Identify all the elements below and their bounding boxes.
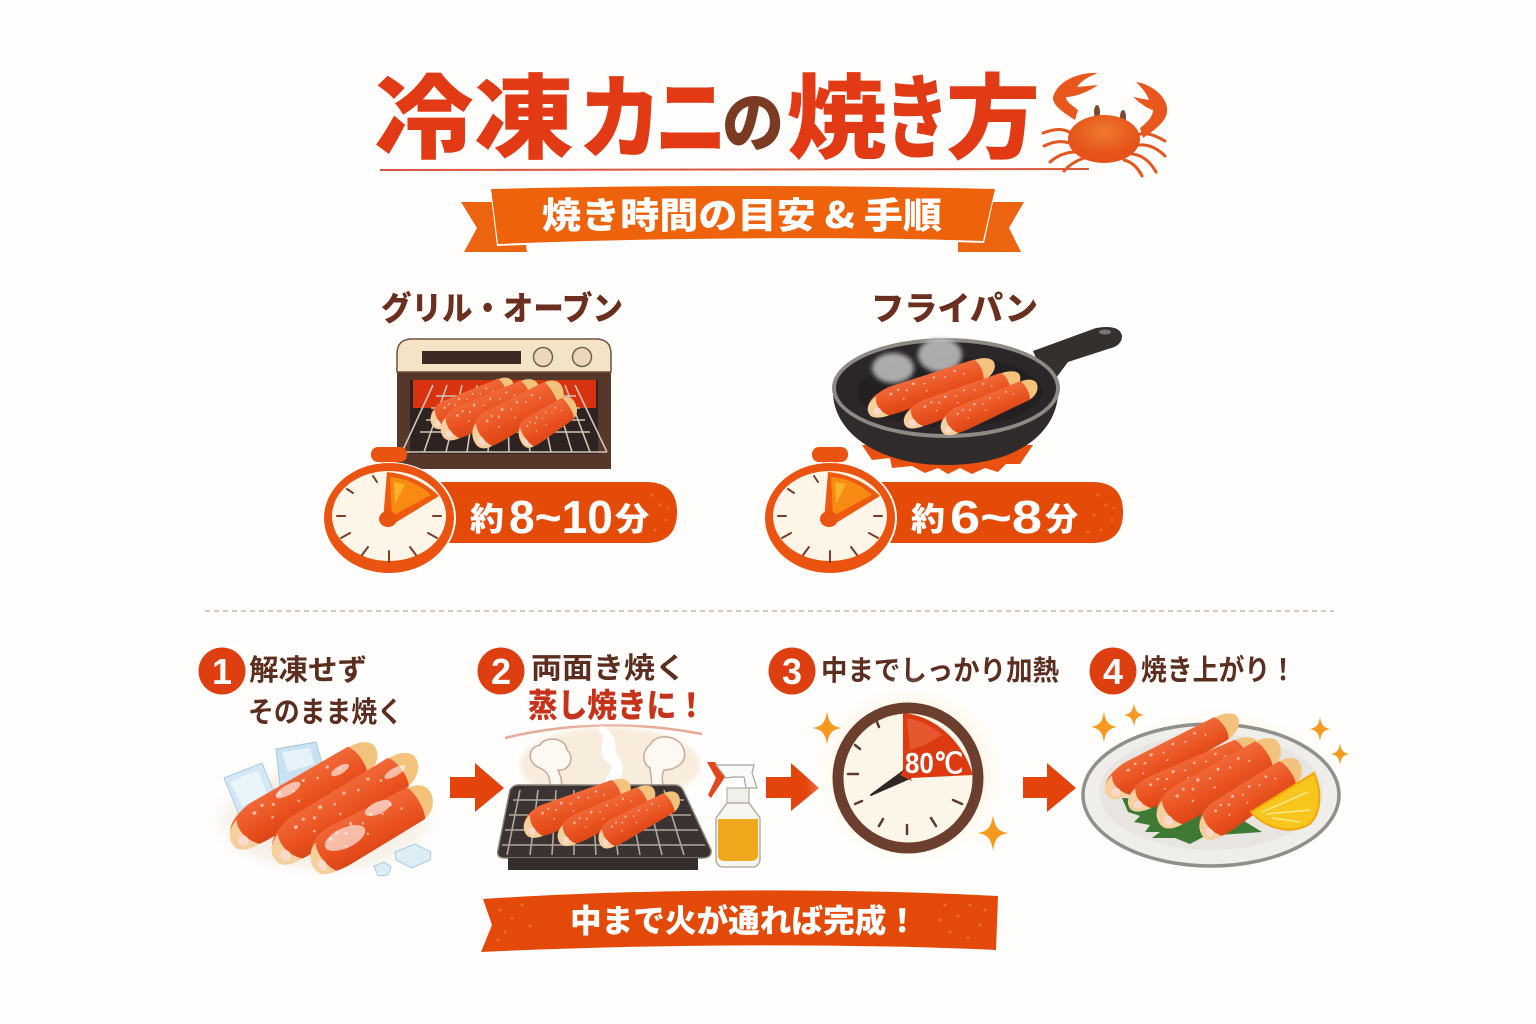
icon: stopwatch <box>322 447 456 574</box>
step 3 <box>768 648 1059 875</box>
bottom ribbon: 中まで火が通れば完成！ <box>570 896 918 942</box>
title: 方 <box>946 69 1040 171</box>
time pill: 分 <box>1045 494 1078 540</box>
icon: sparkle <box>978 815 1008 851</box>
step 4 number <box>1090 648 1136 694</box>
title: き <box>885 69 949 171</box>
icon: crab <box>1043 73 1167 176</box>
step 3 text: 中までしっかり加熱 <box>821 649 1059 689</box>
timer: grill oven <box>322 447 677 574</box>
time pill: 分 <box>615 494 649 540</box>
subtitle ribbon: 焼き時間の目安 & 手順 <box>542 187 942 239</box>
timer: frying pan <box>763 447 1123 574</box>
icon: sparkle <box>1091 711 1117 743</box>
subtitle ribbon <box>461 185 1024 252</box>
illustration: frozen crab legs <box>200 735 450 882</box>
bottom ribbon <box>481 890 998 952</box>
step 4 number: 4 <box>1103 651 1123 692</box>
icon: frying pan <box>832 327 1122 474</box>
step 2 number: 2 <box>491 651 511 692</box>
step 1 <box>198 648 450 882</box>
time pill: 6~8 <box>950 491 1042 543</box>
step 1 number: 1 <box>212 651 232 692</box>
icon: sparkle <box>1309 717 1331 741</box>
title: 凍 <box>474 69 574 171</box>
icon: sparkle <box>1331 743 1349 765</box>
arrow 2 <box>766 763 819 811</box>
step 3 number <box>768 648 816 694</box>
icon: spray bottle <box>707 762 760 867</box>
heading: grill oven: グリル・オーブン <box>381 282 623 330</box>
step 3 number: 3 <box>782 651 802 692</box>
title: 冷 <box>374 69 474 171</box>
arrow 3 <box>1023 763 1076 812</box>
illustration: thermometer dial 80 degrees <box>805 675 1015 875</box>
time pill <box>872 482 1123 543</box>
step 2 <box>478 645 760 870</box>
step 1 text: 解凍せず <box>249 654 367 687</box>
step 4 text: 焼き上がり！ <box>1141 647 1296 689</box>
title: カ <box>578 69 662 171</box>
icon: sparkle <box>1124 703 1144 727</box>
time pill <box>430 482 677 543</box>
title underline <box>380 169 1089 170</box>
illustration: thermometer dial 80 degrees: 80℃ <box>905 748 963 780</box>
step 1 number <box>198 648 246 694</box>
icon: stopwatch <box>763 447 897 574</box>
title <box>374 69 1040 171</box>
step 2 text: 両面き焼く <box>531 645 686 687</box>
step 2 number <box>478 648 524 694</box>
title: 焼 <box>787 69 887 171</box>
icon: sparkle <box>813 711 841 745</box>
heading: frying pan: フライパン <box>871 282 1038 330</box>
title: の <box>722 86 784 160</box>
time pill: 約 <box>470 494 504 540</box>
step 2 text: 蒸し焼きに！ <box>528 679 706 727</box>
icon: oven <box>397 339 611 469</box>
step 4 <box>1075 647 1355 880</box>
title: ニ <box>655 69 727 171</box>
time pill: 約 <box>911 494 945 540</box>
step 1 text <box>248 654 403 729</box>
arrow 1 <box>450 763 504 812</box>
time pill: 8~10 <box>509 491 613 543</box>
step 2 text <box>528 645 706 727</box>
step 1 text: そのまま焼く <box>248 696 403 729</box>
illustration: plated crab legs <box>1075 700 1355 880</box>
illustration: grill with steam <box>498 727 711 870</box>
